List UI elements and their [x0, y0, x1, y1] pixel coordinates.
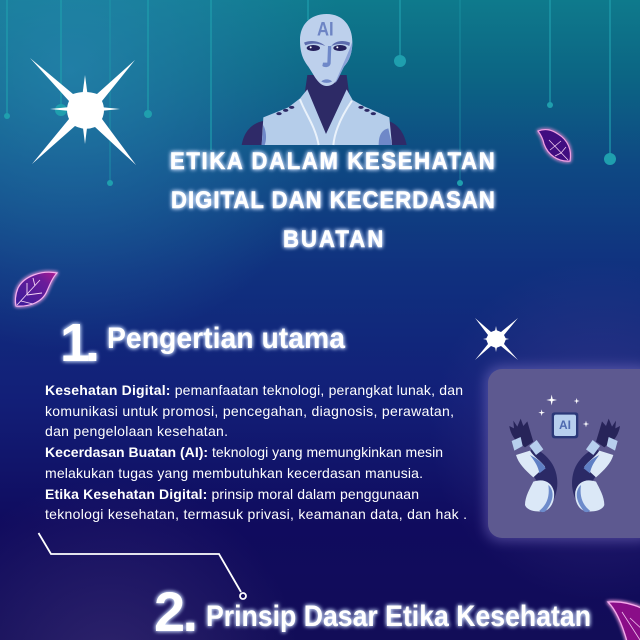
text block: definitions	[45, 382, 467, 522]
icon: neon leaf bottom right	[608, 602, 640, 640]
title: DIGITAL DAN KECERDASAN	[171, 186, 495, 213]
icon: robot with AI head	[242, 14, 407, 145]
heading: section 2: Prinsip Dasar Etika Kesehatan	[206, 600, 591, 633]
title	[170, 147, 495, 252]
heading: section 2	[154, 580, 591, 640]
text block: definitions: teknologi kesehatan, termasuk privasi, keamanan data, dan hak .	[45, 506, 467, 522]
hanging lines with dots	[4, 0, 616, 186]
icon: small sparkle star	[475, 318, 518, 360]
icon: left robot arm	[509, 419, 557, 512]
text block: definitions: Kesehatan Digital: pemanfaatan teknologi, perangkat lunak, dan	[45, 382, 463, 398]
title: ETIKA DALAM KESEHATAN	[170, 147, 495, 174]
icon: neon leaf left	[15, 272, 57, 306]
heading: section 1	[60, 313, 345, 373]
heading: section 1: Pengertian utama	[107, 322, 345, 355]
icon: AI chip: AI	[559, 418, 571, 432]
connector line	[38, 533, 246, 599]
label: AI on forehead: AI	[317, 19, 334, 40]
text block: definitions: melakukan tugas yang membutuhkan kecerdasan manusia.	[45, 465, 423, 481]
title: BUATAN	[283, 225, 383, 252]
text block: definitions: Kecerdasan Buatan (AI): teknologi yang memungkinkan mesin	[45, 444, 443, 460]
icon: neon leaf right	[538, 130, 570, 161]
panel: AI hands card	[485, 366, 640, 541]
icon: sparkles	[538, 395, 589, 427]
icon: right robot arm	[572, 419, 620, 512]
icon: large sparkle star	[30, 58, 136, 165]
text block: definitions: komunikasi untuk promosi, pencegahan, diagnosis, perawatan,	[45, 403, 454, 419]
text block: definitions: Etika Kesehatan Digital: prinsip moral dalam penggunaan	[45, 486, 419, 502]
heading: section 1: 1.	[60, 313, 100, 373]
text block: definitions: dan pengelolaan kesehatan.	[45, 423, 228, 439]
